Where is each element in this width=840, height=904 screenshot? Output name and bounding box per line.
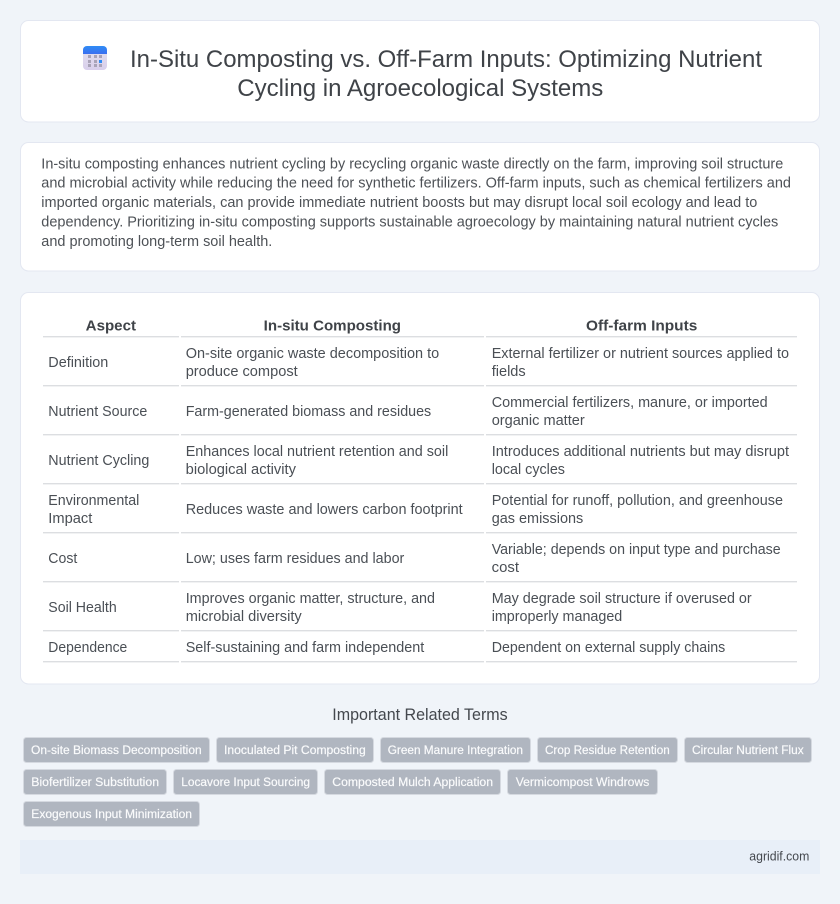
table row: Environmental Impact: Potential for runoff, pollution, and greenhouse bbox=[492, 493, 783, 509]
table row: Definition: On-site organic waste decomposition to bbox=[186, 346, 439, 362]
table row: Nutrient Cycling: local cycles bbox=[492, 462, 565, 478]
table row: Cost: Low; uses farm residues and labor bbox=[186, 551, 404, 567]
panel: title header bbox=[20, 20, 820, 122]
table row: Nutrient Cycling: biological activity bbox=[186, 462, 297, 478]
table row: Environmental Impact: Reduces waste and lowers carbon footprint bbox=[186, 502, 463, 518]
tag: Biofertilizer Substitution bbox=[24, 770, 166, 794]
table row: Environmental Impact bbox=[43, 493, 797, 533]
text block: summary: In-situ composting enhances nutrient cycling by recycling organic waste directly on the farm, improving soil structure bbox=[41, 156, 783, 172]
tag: Green Manure Integration bbox=[380, 738, 530, 762]
footer bar bbox=[20, 840, 820, 874]
tag: Inoculated Pit Composting bbox=[216, 738, 374, 762]
tag: Green Manure Integration: Green Manure Integration bbox=[388, 743, 523, 757]
table row: Nutrient Cycling: Enhances local nutrient retention and soil bbox=[186, 444, 448, 460]
tag: Vermicompost Windrows bbox=[508, 770, 658, 794]
table row: Environmental Impact: Environmental bbox=[48, 493, 139, 509]
table row: Cost: cost bbox=[492, 560, 519, 576]
table row: Environmental Impact: gas emissions bbox=[492, 511, 583, 527]
tag: Crop Residue Retention: Crop Residue Retention bbox=[545, 743, 670, 757]
tag: Crop Residue Retention bbox=[538, 738, 678, 762]
tag: Exogenous Input Minimization: Exogenous Input Minimization bbox=[31, 807, 192, 821]
table header row bbox=[43, 319, 797, 337]
tag: Locavore Input Sourcing: Locavore Input Sourcing bbox=[181, 775, 310, 789]
icon: calendar bbox=[83, 46, 107, 70]
table row: Definition bbox=[43, 346, 797, 386]
text block: summary: and microbial activity while reducing the need for synthetic fertilizers. Off-farm inputs, such as chemical fertilizers and bbox=[41, 175, 791, 191]
table row: Definition: Definition bbox=[48, 355, 108, 371]
table row: Soil Health bbox=[43, 591, 797, 631]
title: In-Situ Composting vs. Off-Farm Inputs: Optimizing Nutrient bbox=[130, 46, 762, 73]
title: Cycling in Agroecological Systems bbox=[237, 75, 603, 102]
tag: Vermicompost Windrows: Vermicompost Windrows bbox=[516, 775, 649, 789]
table row: Nutrient Source bbox=[43, 395, 797, 435]
text block: summary: dependency. Prioritizing in-situ composting supports sustainable agroecology by maintaining natural nutrient cycles bbox=[41, 215, 778, 231]
table row: Nutrient Source: Nutrient Source bbox=[48, 404, 147, 420]
table row: Dependence: Self-sustaining and farm independent bbox=[186, 640, 424, 656]
panel: comparison table bbox=[20, 292, 820, 684]
table row: Cost: Variable; depends on input type and purchase bbox=[492, 542, 781, 558]
heading: important related terms: Important Related Terms bbox=[332, 706, 508, 724]
table row: Dependence bbox=[43, 640, 797, 662]
table row: Definition: fields bbox=[492, 364, 526, 380]
table header row: Off-farm Inputs bbox=[586, 319, 697, 335]
tag: Biofertilizer Substitution: Biofertilizer Substitution bbox=[31, 775, 159, 789]
tag: On-site Biomass Decomposition: On-site Biomass Decomposition bbox=[31, 743, 202, 757]
table row: Nutrient Cycling: Nutrient Cycling bbox=[48, 453, 149, 469]
table row: Soil Health: Soil Health bbox=[48, 600, 117, 616]
table row: Soil Health: Improves organic matter, structure, and bbox=[186, 591, 435, 607]
tag: Circular Nutrient Flux: Circular Nutrient Flux bbox=[692, 743, 804, 757]
footer bar: agridif.com bbox=[749, 849, 809, 864]
table row: Nutrient Cycling bbox=[43, 444, 797, 484]
table row: Cost bbox=[43, 542, 797, 582]
tag: Circular Nutrient Flux bbox=[684, 738, 812, 762]
table row: Dependence: Dependence bbox=[48, 640, 127, 656]
tag: On-site Biomass Decomposition bbox=[24, 738, 210, 762]
table row: Nutrient Cycling: Introduces additional nutrients but may disrupt bbox=[492, 444, 789, 460]
table row: Soil Health: May degrade soil structure if overused or bbox=[492, 591, 752, 607]
tag: Composted Mulch Application bbox=[324, 770, 500, 794]
table header row: In-situ Composting bbox=[264, 319, 401, 335]
title bbox=[130, 46, 762, 102]
tag: Exogenous Input Minimization bbox=[24, 802, 200, 826]
table row: Soil Health: improperly managed bbox=[492, 609, 622, 625]
text block: summary bbox=[41, 156, 791, 250]
table row: Cost: Cost bbox=[48, 551, 77, 567]
text block: summary: imported organic materials, can provide immediate nutrient boosts but may disrupt local soil ecology and lead to bbox=[41, 195, 757, 211]
tag: Inoculated Pit Composting: Inoculated Pit Composting bbox=[224, 743, 366, 757]
table row: Nutrient Source: organic matter bbox=[492, 413, 585, 429]
table header row: Aspect bbox=[86, 319, 136, 335]
table row: Definition: produce compost bbox=[186, 364, 298, 380]
table row: Definition: External fertilizer or nutrient sources applied to bbox=[492, 346, 789, 362]
table row: Nutrient Source: Farm-generated biomass and residues bbox=[186, 404, 431, 420]
text block: summary: and promoting long-term soil health. bbox=[41, 234, 272, 250]
table row: Soil Health: microbial diversity bbox=[186, 609, 302, 625]
table row: Nutrient Source: Commercial fertilizers, manure, or imported bbox=[492, 395, 768, 411]
panel: summary paragraph bbox=[20, 142, 820, 271]
panel: related term tags bbox=[24, 738, 812, 826]
tag: Locavore Input Sourcing bbox=[174, 770, 318, 794]
tag: Composted Mulch Application: Composted Mulch Application bbox=[332, 775, 493, 789]
table row: Environmental Impact: Impact bbox=[48, 511, 92, 527]
table row: Dependence: Dependent on external supply chains bbox=[492, 640, 725, 656]
